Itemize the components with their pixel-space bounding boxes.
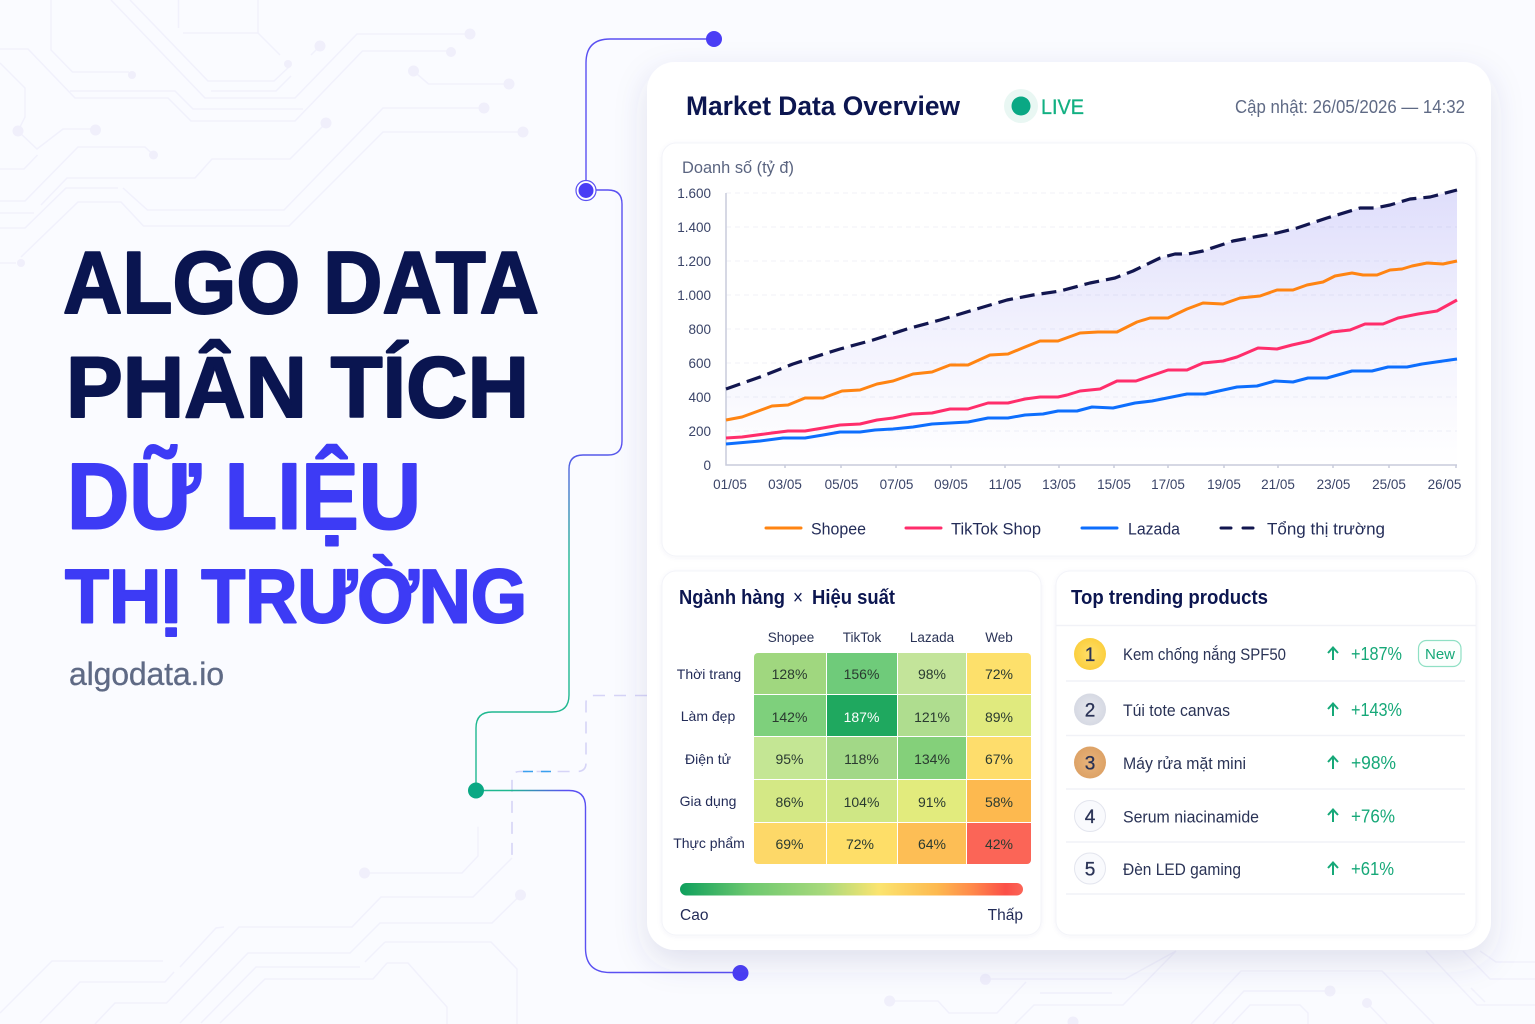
row labels: Thực phẩm bbox=[673, 835, 745, 851]
market area fill bbox=[726, 190, 1457, 465]
row 3: +98% bbox=[1351, 753, 1396, 773]
line: tiktok shop bbox=[726, 300, 1457, 438]
row 2: +143% bbox=[1351, 700, 1402, 720]
connector: bottom route bbox=[476, 790, 748, 981]
row 1: Kem chống nắng SPF50 bbox=[1123, 645, 1286, 664]
heatmap values: 98% bbox=[918, 666, 946, 682]
x axis labels: 05/05 bbox=[825, 477, 858, 492]
heatmap title bbox=[679, 587, 895, 609]
heatmap values: 86% bbox=[775, 794, 804, 810]
title line 1: ALGO DATA bbox=[63, 233, 539, 332]
y axis labels: 1.600 bbox=[677, 186, 711, 201]
y axis labels: 1.200 bbox=[677, 254, 711, 269]
connector: top node to panel bbox=[586, 31, 722, 190]
heatmap values: 91% bbox=[918, 794, 946, 810]
panel: sales chart bbox=[662, 143, 1476, 556]
legend: lazada bbox=[1082, 520, 1181, 538]
y axis labels bbox=[677, 186, 711, 473]
heatmap values: 95% bbox=[775, 751, 804, 767]
y axis labels: 600 bbox=[688, 356, 711, 371]
column headers bbox=[768, 630, 1013, 645]
legend: tiktok shop: TikTok Shop bbox=[951, 520, 1041, 538]
line: lazada bbox=[726, 359, 1457, 444]
row 1 bbox=[1074, 638, 1461, 670]
heatmap values: 69% bbox=[775, 836, 804, 852]
panel: top trending products bbox=[1056, 571, 1476, 935]
heatmap title: Hiệu suất bbox=[812, 587, 895, 609]
x axis labels: 11/05 bbox=[989, 477, 1021, 492]
row 1: New bbox=[1425, 646, 1455, 663]
heatmap title: × bbox=[793, 587, 803, 609]
color scale bbox=[680, 883, 1023, 896]
x axis labels: 25/05 bbox=[1372, 477, 1406, 492]
row labels: Điện tử bbox=[685, 751, 731, 767]
scale label high: Cao bbox=[680, 907, 708, 924]
heatmap values: 134% bbox=[914, 751, 950, 767]
row 4: 4 bbox=[1085, 807, 1096, 828]
title block bbox=[63, 233, 539, 640]
heatmap title: Ngành hàng bbox=[679, 587, 785, 609]
legend: lazada: Lazada bbox=[1128, 520, 1181, 538]
panel: heatmap bbox=[662, 571, 1041, 935]
y axis labels: 200 bbox=[688, 424, 711, 439]
heatmap values: 64% bbox=[918, 836, 946, 852]
row labels: Thời trang bbox=[677, 666, 741, 682]
row labels: Làm đẹp bbox=[681, 708, 735, 724]
title line 2: PHÂN TÍCH bbox=[66, 340, 529, 436]
row labels bbox=[673, 666, 745, 851]
x axis labels: 23/05 bbox=[1317, 477, 1350, 492]
website: algodata.io bbox=[69, 656, 224, 692]
x axis labels: 03/05 bbox=[768, 477, 802, 492]
x axis labels: 07/05 bbox=[880, 477, 913, 492]
legend: total market: Tổng thị trường bbox=[1267, 520, 1385, 538]
chart title: Doanh số (tỷ đ) bbox=[682, 158, 794, 177]
legend: tiktok shop bbox=[906, 520, 1041, 538]
row 4: Serum niacinamide bbox=[1123, 808, 1259, 826]
x axis labels: 26/05 bbox=[1428, 477, 1461, 492]
line: shopee bbox=[726, 261, 1457, 420]
row 4: +76% bbox=[1351, 806, 1395, 826]
line: total market bbox=[726, 190, 1457, 389]
heatmap values: 156% bbox=[844, 666, 879, 682]
title line 3: DỮ LIỆU bbox=[67, 444, 421, 548]
heatmap values: 142% bbox=[772, 709, 807, 725]
x axis labels bbox=[713, 477, 1461, 492]
y axis labels: 800 bbox=[688, 322, 711, 337]
connector: middle route bbox=[476, 190, 622, 790]
x axis labels: 15/05 bbox=[1097, 477, 1131, 492]
column headers: TikTok bbox=[843, 630, 881, 645]
heatmap values: 104% bbox=[844, 794, 879, 810]
dashed connector bbox=[512, 696, 647, 857]
heatmap values: 121% bbox=[914, 709, 950, 725]
x axis labels: 13/05 bbox=[1042, 477, 1076, 492]
heading: market data overview: Market Data Overview bbox=[686, 91, 961, 121]
node: ring bbox=[576, 180, 596, 200]
row 2: 2 bbox=[1085, 700, 1095, 722]
y axis labels: 0 bbox=[703, 458, 711, 473]
row 2: Túi tote canvas bbox=[1123, 702, 1230, 720]
column headers: Lazada bbox=[910, 630, 955, 645]
x axis labels: 19/05 bbox=[1207, 477, 1241, 492]
panel title: Top trending products bbox=[1071, 587, 1268, 609]
panel: dashboard card bbox=[647, 62, 1491, 950]
row 3: Máy rửa mặt mini bbox=[1123, 755, 1246, 773]
row 3: 3 bbox=[1085, 754, 1095, 774]
heatmap values: 67% bbox=[985, 751, 1013, 767]
heatmap values bbox=[772, 666, 1013, 852]
node: green bbox=[468, 782, 484, 798]
heatmap values: 58% bbox=[985, 794, 1013, 810]
row 5: Đèn LED gaming bbox=[1123, 861, 1241, 879]
x axis labels: 21/05 bbox=[1261, 477, 1295, 492]
live badge bbox=[1004, 89, 1084, 123]
y axis labels: 400 bbox=[688, 390, 711, 405]
heatmap values: 187% bbox=[844, 709, 879, 725]
x axis labels: 01/05 bbox=[713, 477, 747, 492]
y axis labels: 1.000 bbox=[677, 288, 711, 303]
x axis labels: 09/05 bbox=[934, 477, 968, 492]
heatmap values: 72% bbox=[985, 666, 1013, 682]
legend: shopee bbox=[766, 520, 866, 538]
row 5: 5 bbox=[1085, 860, 1095, 880]
row 1: +187% bbox=[1351, 644, 1402, 664]
heatmap values: 72% bbox=[846, 836, 874, 852]
heatmap values: 89% bbox=[985, 709, 1013, 725]
row 4 bbox=[1074, 800, 1395, 832]
column headers: Web bbox=[985, 630, 1013, 645]
axes bbox=[726, 193, 1457, 468]
column headers: Shopee bbox=[768, 630, 814, 645]
row labels: Gia dụng bbox=[680, 793, 736, 809]
row 5 bbox=[1074, 853, 1394, 884]
title line 4: THỊ TRƯỜNG bbox=[65, 554, 527, 640]
live badge: LIVE bbox=[1041, 96, 1084, 119]
heatmap cells bbox=[754, 653, 1031, 864]
update time: Cập nhật: 26/05/2026 — 14:32 bbox=[1235, 97, 1465, 117]
heatmap values: 118% bbox=[844, 751, 879, 767]
row 2 bbox=[1074, 694, 1402, 726]
row 3 bbox=[1074, 746, 1396, 778]
row 5: +61% bbox=[1351, 859, 1394, 879]
x axis labels: 17/05 bbox=[1151, 477, 1185, 492]
legend: shopee: Shopee bbox=[811, 520, 866, 538]
scale label low: Thấp bbox=[988, 907, 1023, 924]
row 1: 1 bbox=[1085, 645, 1095, 666]
y axis labels: 1.400 bbox=[677, 220, 711, 235]
heatmap values: 42% bbox=[985, 836, 1013, 852]
heatmap values: 128% bbox=[772, 666, 807, 682]
